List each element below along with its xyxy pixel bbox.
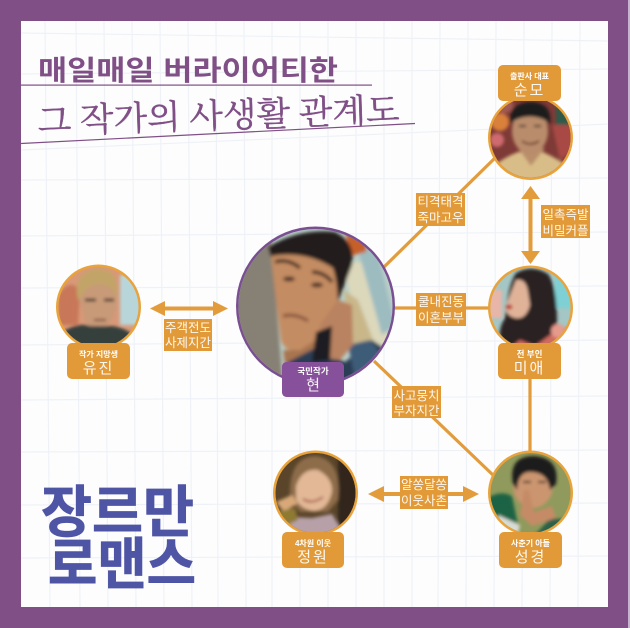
relation tag: teacher and student: 주객전도 xyxy=(165,321,211,335)
relation tag: divorced couple: 이혼부부 xyxy=(418,311,464,325)
relation tag: neighbors: 알쏭달쏭 xyxy=(401,478,447,492)
label: son: 성경 xyxy=(515,549,546,566)
label: hero writer: 현 xyxy=(306,377,320,394)
relation tag: divorced couple: 쿨내진동 xyxy=(418,295,464,309)
relation tag: father and son: 사고뭉치 xyxy=(393,389,440,403)
connector: hero to son xyxy=(374,361,494,476)
title line 1: 매일매일 버라이어티한 xyxy=(38,55,338,86)
drama logo: 로맨스 xyxy=(48,533,196,596)
title rule 2 xyxy=(21,124,415,144)
label: assistant xyxy=(67,343,130,379)
label: son: 사춘기 아들 xyxy=(511,538,551,548)
drama logo xyxy=(41,481,196,596)
label: assistant: 작가 지망생 xyxy=(79,349,118,359)
relation tag: childhood friends: 죽마고우 xyxy=(417,211,464,225)
label: ex-wife: 전 부인 xyxy=(517,349,543,359)
label: hero writer: 국민작가 xyxy=(297,366,329,376)
portrait: neighbor xyxy=(273,450,358,532)
label: hero writer xyxy=(282,362,344,397)
portrait: assistant xyxy=(56,264,141,343)
relation tag: neighbors: 이웃사촌 xyxy=(401,494,447,508)
relation tag: teacher and student xyxy=(164,319,212,351)
drama logo: 장르만 xyxy=(41,481,194,544)
connector: ex-wife to son xyxy=(528,378,532,454)
connector: hero to ex-wife xyxy=(394,306,490,310)
arrow: publisher and ex-wife xyxy=(521,186,540,264)
label: publisher: 순모 xyxy=(514,82,545,99)
relation tag: childhood friends: 티격태격 xyxy=(417,195,464,209)
label: assistant: 유진 xyxy=(83,360,114,377)
relation tag: father and son xyxy=(392,386,441,418)
relation tag: neighbors xyxy=(400,476,448,509)
relation tag: secret couple xyxy=(541,205,590,238)
portrait: publisher xyxy=(488,101,573,180)
connector: hero to publisher xyxy=(384,157,496,267)
label: neighbor xyxy=(282,532,344,568)
relation tag: divorced couple xyxy=(416,293,466,326)
relation tag: father and son: 부자지간 xyxy=(393,404,440,418)
label: neighbor: 정원 xyxy=(297,549,329,566)
label: ex-wife: 미애 xyxy=(514,360,545,377)
label: neighbor: 4차원 이웃 xyxy=(295,538,332,548)
title line 2: 그 작가의 사생활 관계도 xyxy=(37,92,400,141)
relation tag: childhood friends xyxy=(416,193,465,226)
portrait: son xyxy=(485,450,575,536)
relation tag: teacher and student: 사제지간 xyxy=(165,336,211,350)
title rule 1 xyxy=(21,84,372,86)
portrait: hero writer xyxy=(236,226,395,380)
label: publisher xyxy=(498,65,561,101)
arrow: assistant and hero xyxy=(150,301,228,316)
label: publisher: 출판사 대표 xyxy=(510,71,550,81)
label: ex-wife xyxy=(498,343,561,379)
arrow: neighbor and son xyxy=(368,486,479,502)
label: son xyxy=(499,532,562,568)
relation tag: secret couple: 일촉즉발 xyxy=(542,208,589,222)
relation tag: secret couple: 비밀커플 xyxy=(542,224,589,238)
portrait: ex-wife xyxy=(488,266,573,343)
